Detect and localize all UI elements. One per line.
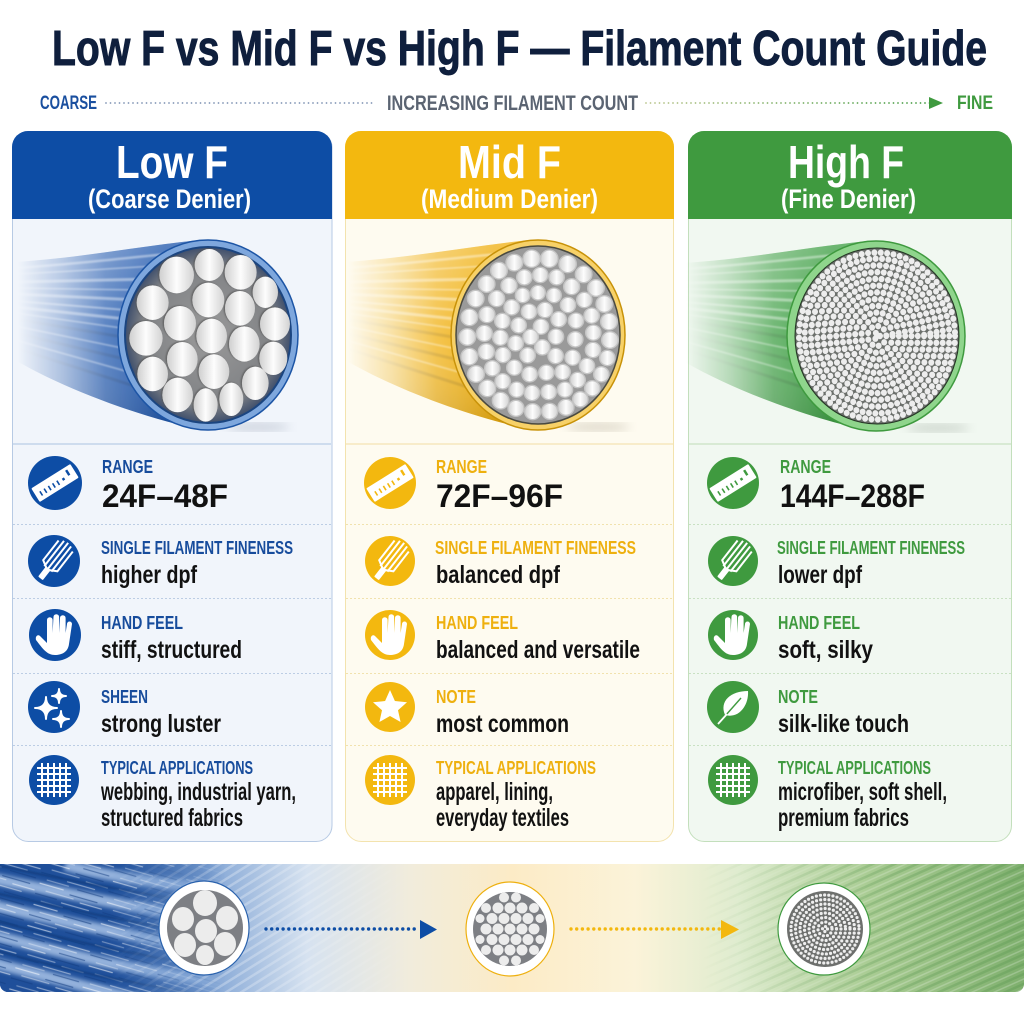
row: note (707, 681, 909, 738)
row: range: RANGE (780, 457, 831, 477)
row: note: NOTE (436, 687, 476, 707)
header: low f (12, 131, 332, 219)
cross-section: fine (778, 883, 870, 975)
icon: star (365, 682, 415, 732)
row: typical applications: TYPICAL APPLICATIONS (778, 758, 931, 778)
row: typical applications: webbing, industrial yarn, (100, 778, 296, 806)
row: hand feel (708, 610, 873, 664)
row: hand feel (29, 609, 242, 664)
icon: feather (707, 681, 759, 733)
icon: ruler (364, 457, 416, 509)
yarn cross-section: low f (15, 240, 298, 431)
header: low f: (Coarse Denier) (88, 184, 251, 214)
row: note: silk-like touch (778, 710, 909, 738)
header: high f: (Fine Denier) (781, 184, 916, 214)
header: mid f: (Medium Denier) (421, 184, 598, 214)
row: hand feel: balanced and versatile (436, 636, 640, 664)
row: typical applications (29, 755, 296, 832)
row: range (28, 456, 228, 514)
row: note: NOTE (778, 687, 818, 707)
icon: fabric grid (29, 755, 79, 805)
icon: hand (29, 609, 81, 661)
row: single filament fineness (28, 535, 293, 589)
row: range (707, 457, 925, 514)
row: range: RANGE (436, 457, 487, 477)
row: hand feel: HAND FEEL (778, 613, 860, 633)
icon: filament brush (28, 535, 80, 587)
row: range: RANGE (102, 457, 153, 477)
arrow: medium to fine (571, 920, 739, 939)
bottom strip: coarse to fine progression (0, 864, 1024, 992)
icon: sparkles (28, 681, 80, 733)
row: typical applications (365, 755, 596, 832)
cross-section: coarse (159, 881, 249, 975)
row: single filament fineness: balanced dpf (436, 561, 561, 589)
header: high f: High F (788, 136, 904, 188)
row: typical applications: TYPICAL APPLICATIONS (101, 758, 253, 778)
row: single filament fineness (365, 536, 636, 589)
panel: high f (683, 131, 1012, 842)
row: hand feel (365, 610, 640, 664)
icon: filament brush (365, 536, 415, 586)
scale label: fine: FINE (957, 93, 993, 114)
row: single filament fineness: lower dpf (778, 561, 863, 589)
row: hand feel: HAND FEEL (436, 613, 518, 633)
row: hand feel: HAND FEEL (101, 613, 183, 633)
row: typical applications (708, 755, 947, 832)
row: typical applications: premium fabrics (778, 804, 909, 832)
panel: low f (12, 131, 332, 842)
row: range: 144F–288F (780, 478, 925, 514)
icon: ruler (28, 456, 82, 510)
icon: hand (708, 610, 758, 660)
row: typical applications: everyday textiles (436, 804, 569, 832)
yarn cross-section: high f (683, 241, 970, 432)
header: high f (688, 131, 1012, 219)
row: range: 72F–96F (436, 478, 563, 514)
header: low f: Low F (116, 136, 228, 188)
icon: filament brush (708, 536, 758, 586)
rope texture (0, 864, 218, 992)
row: single filament fineness: SINGLE FILAMENT FINENESS (435, 538, 636, 558)
row: single filament fineness: SINGLE FILAMENT FINENESS (101, 538, 293, 558)
row: range: 24F–48F (102, 478, 228, 514)
row: hand feel: stiff, structured (101, 636, 242, 664)
cross-section: medium (466, 882, 554, 976)
row: range (364, 457, 563, 514)
icon: fabric grid (365, 755, 415, 805)
row: sheen: strong luster (101, 710, 221, 738)
scale label: coarse: COARSE (40, 93, 97, 114)
row: sheen: SHEEN (101, 687, 148, 707)
panel: mid f (345, 131, 674, 842)
filament count scale (40, 92, 993, 115)
row: note (365, 682, 569, 738)
icon: fabric grid (708, 755, 758, 805)
row: hand feel: soft, silky (778, 636, 873, 664)
row: typical applications: microfiber, soft shell, (778, 778, 947, 806)
row: sheen (28, 681, 221, 738)
row: typical applications: structured fabrics (101, 804, 243, 832)
arrow: coarse to medium (266, 920, 437, 939)
arrowhead (929, 97, 943, 109)
row: note: most common (436, 710, 569, 738)
yarn cross-section: mid f (345, 240, 630, 431)
scale label: increasing filament count: INCREASING FILAMENT COUNT (387, 92, 638, 115)
header: mid f: Mid F (458, 136, 561, 188)
row: typical applications: TYPICAL APPLICATIONS (436, 758, 596, 778)
icon: ruler (707, 457, 759, 509)
row: single filament fineness (708, 536, 965, 589)
row: typical applications: apparel, lining, (436, 778, 553, 806)
icon: hand (365, 610, 415, 660)
header: mid f (345, 131, 674, 219)
row: single filament fineness: higher dpf (101, 561, 198, 589)
